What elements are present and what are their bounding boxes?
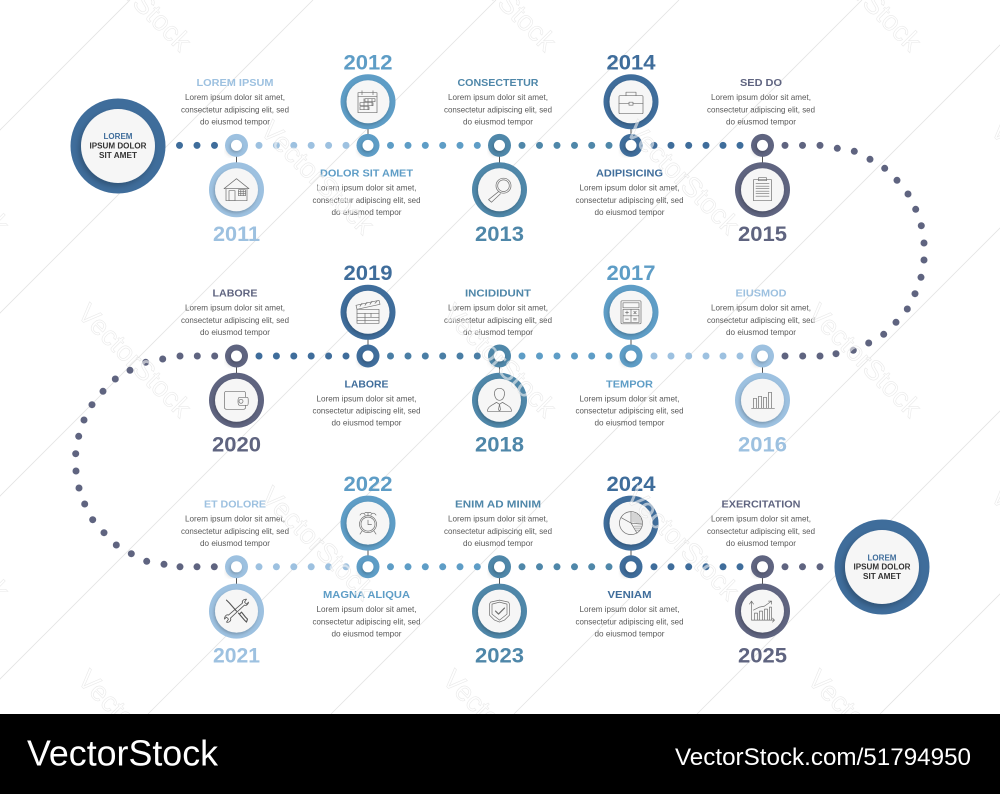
- milestone 2019: consectetur adipiscing elit, sed: [312, 406, 421, 416]
- milestone 2025: consectetur adipiscing elit, sed: [707, 526, 815, 536]
- milestone 2015: Lorem ipsum dolor sit amet,: [711, 92, 811, 102]
- icon: growth chart: [750, 601, 774, 622]
- start circle: [70, 98, 166, 194]
- milestone 2016: Lorem ipsum dolor sit amet,: [711, 303, 811, 313]
- milestone 2025: [707, 498, 815, 667]
- footer bar: [0, 714, 1000, 794]
- milestone 2017: consectetur adipiscing elit, sed: [576, 406, 684, 416]
- milestone 2018: INCIDIDUNT: [465, 288, 532, 300]
- end circle: IPSUM DOLOR: [854, 562, 911, 572]
- milestone 2023: ENIM AD MINIM: [455, 498, 541, 510]
- milestone 2019: [312, 262, 421, 428]
- milestone 2013: Lorem ipsum dolor sit amet,: [448, 92, 548, 102]
- end circle: SIT AMET: [863, 571, 902, 581]
- dotted path: row 1: [176, 142, 744, 149]
- milestone 2011: LOREM IPSUM: [196, 77, 274, 89]
- icon: shield with check: [490, 600, 510, 622]
- icon: clipboard: [754, 178, 772, 201]
- milestone 2020: [181, 288, 289, 457]
- milestone 2022: Lorem ipsum dolor sit amet,: [316, 604, 416, 614]
- milestone 2012: consectetur adipiscing elit, sed: [312, 195, 421, 205]
- dotted path: row 2: [256, 352, 744, 360]
- icon: bar chart: [752, 392, 774, 408]
- milestone 2015: 2015: [738, 223, 787, 246]
- footer bar: VectorStock: [27, 732, 219, 774]
- icon: calendar: [358, 91, 377, 113]
- milestone 2018: do eiusmod tempor: [463, 327, 533, 337]
- milestone 2015: SED DO: [740, 77, 782, 89]
- milestone 2021: do eiusmod tempor: [200, 538, 270, 548]
- watermarks: VectorStock: [620, 480, 746, 606]
- end circle: LOREM: [868, 552, 896, 562]
- milestone 2014: ADIPISICING: [596, 168, 663, 180]
- end circle: [834, 520, 930, 614]
- milestone 2016: 2016: [738, 434, 787, 457]
- watermarks: VectorStock: [72, 297, 198, 423]
- milestone 2011: Lorem ipsum dolor sit amet,: [185, 92, 285, 102]
- dotted path: right curve: [782, 142, 928, 360]
- milestone 2017: do eiusmod tempor: [594, 418, 665, 428]
- milestone 2020: consectetur adipiscing elit, sed: [181, 315, 289, 325]
- milestone 2020: Lorem ipsum dolor sit amet,: [185, 303, 285, 313]
- footer bar: VectorStock.com/51794950: [675, 744, 971, 771]
- milestone 2024: consectetur adipiscing elit, sed: [576, 616, 684, 626]
- milestone 2013: [444, 77, 552, 246]
- watermarks: VectorStock: [72, 663, 198, 789]
- milestone 2025: 2025: [738, 644, 787, 667]
- milestone 2023: do eiusmod tempor: [463, 538, 533, 548]
- milestone 2015: do eiusmod tempor: [726, 116, 796, 126]
- start circle: LOREM: [104, 131, 132, 141]
- milestone 2014: 2014: [606, 51, 656, 74]
- milestone 2013: do eiusmod tempor: [463, 116, 533, 126]
- icon: calculator: [621, 301, 641, 324]
- icon: pie chart: [620, 512, 642, 535]
- milestone 2012: [312, 51, 421, 217]
- milestone 2014: consectetur adipiscing elit, sed: [576, 195, 684, 205]
- milestone 2011: consectetur adipiscing elit, sed: [181, 104, 289, 114]
- milestone 2014: do eiusmod tempor: [594, 207, 665, 217]
- milestone 2020: LABORE: [212, 288, 258, 300]
- milestone 2014: [576, 51, 684, 217]
- watermarks: VectorStock: [802, 663, 928, 789]
- icon: alarm clock: [360, 513, 376, 534]
- icon: crossed tools: [224, 599, 248, 622]
- milestone 2017: [576, 262, 684, 428]
- milestone 2021: ET DOLORE: [204, 498, 266, 510]
- milestone 2024: [576, 473, 684, 638]
- milestone 2021: consectetur adipiscing elit, sed: [181, 526, 289, 536]
- watermarks: VectorStock: [437, 297, 563, 423]
- watermarks: VectorStock: [802, 297, 928, 423]
- milestone 2019: LABORE: [344, 378, 388, 390]
- milestone 2024: do eiusmod tempor: [594, 628, 665, 638]
- milestone 2018: Lorem ipsum dolor sit amet,: [448, 303, 548, 313]
- milestone 2018: consectetur adipiscing elit, sed: [444, 315, 552, 325]
- start circle: SIT AMET: [99, 150, 138, 160]
- milestone 2022: [312, 473, 421, 638]
- milestone 2015: [707, 77, 815, 246]
- milestone 2012: 2012: [344, 51, 392, 74]
- milestone 2023: [444, 498, 552, 667]
- watermarks: VectorStock: [620, 114, 746, 240]
- milestone 2025: EXERCITATION: [722, 498, 800, 510]
- milestone 2020: do eiusmod tempor: [200, 327, 270, 337]
- dotted path: left curve: [72, 352, 218, 570]
- milestone 2023: 2023: [475, 644, 524, 667]
- milestone 2024: 2024: [606, 473, 656, 496]
- milestone 2011: 2011: [213, 223, 260, 246]
- milestone 2020: 2020: [212, 434, 261, 457]
- milestone 2024: VENIAM: [608, 589, 652, 601]
- milestone 2013: consectetur adipiscing elit, sed: [444, 104, 552, 114]
- milestone 2018: [444, 288, 552, 457]
- milestone 2022: 2022: [344, 473, 392, 496]
- milestone 2023: Lorem ipsum dolor sit amet,: [448, 513, 548, 523]
- milestone 2025: do eiusmod tempor: [726, 538, 796, 548]
- milestone 2013: 2013: [475, 223, 524, 246]
- milestone 2019: do eiusmod tempor: [332, 418, 402, 428]
- dotted path: row 3: [256, 563, 824, 570]
- milestone 2021: Lorem ipsum dolor sit amet,: [185, 513, 285, 523]
- milestone 2011: do eiusmod tempor: [200, 116, 270, 126]
- milestone 2022: do eiusmod tempor: [332, 628, 402, 638]
- icon: house: [224, 179, 249, 201]
- milestone 2012: Lorem ipsum dolor sit amet,: [316, 183, 416, 193]
- milestone 2016: do eiusmod tempor: [726, 327, 796, 337]
- milestone 2011: [181, 77, 289, 246]
- milestone 2016: EIUSMOD: [736, 288, 787, 300]
- milestone 2018: 2018: [475, 434, 524, 457]
- milestone 2012: do eiusmod tempor: [332, 207, 402, 217]
- milestone 2014: Lorem ipsum dolor sit amet,: [580, 183, 680, 193]
- milestone 2017: Lorem ipsum dolor sit amet,: [580, 393, 680, 403]
- milestone 2024: Lorem ipsum dolor sit amet,: [580, 604, 680, 614]
- milestone 2016: [707, 288, 815, 457]
- watermarks: VectorStock: [437, 663, 563, 789]
- milestone 2017: TEMPOR: [606, 378, 653, 390]
- icon: briefcase: [619, 92, 643, 114]
- milestone 2022: MAGNA ALIQUA: [323, 589, 410, 601]
- milestone 2019: Lorem ipsum dolor sit amet,: [316, 393, 416, 403]
- watermarks: VectorStock: [255, 114, 381, 240]
- milestone 2015: consectetur adipiscing elit, sed: [707, 104, 815, 114]
- icon: clapperboard: [356, 300, 380, 323]
- start circle: IPSUM DOLOR: [90, 140, 147, 150]
- milestone 2023: consectetur adipiscing elit, sed: [444, 526, 552, 536]
- milestone 2021: 2021: [213, 644, 260, 667]
- milestone 2019: 2019: [344, 262, 392, 285]
- milestone 2022: consectetur adipiscing elit, sed: [312, 616, 421, 626]
- milestone 2012: DOLOR SIT AMET: [320, 168, 414, 180]
- milestone 2013: CONSECTETUR: [458, 77, 539, 89]
- icon: person: [488, 388, 512, 411]
- watermarks: VectorStock: [255, 480, 381, 606]
- milestone 2016: consectetur adipiscing elit, sed: [707, 315, 815, 325]
- icon: wallet: [224, 391, 248, 409]
- milestone 2017: 2017: [606, 262, 656, 285]
- milestone 2025: Lorem ipsum dolor sit amet,: [711, 513, 811, 523]
- milestone 2021: [181, 498, 289, 667]
- icon: magnifier: [488, 178, 511, 202]
